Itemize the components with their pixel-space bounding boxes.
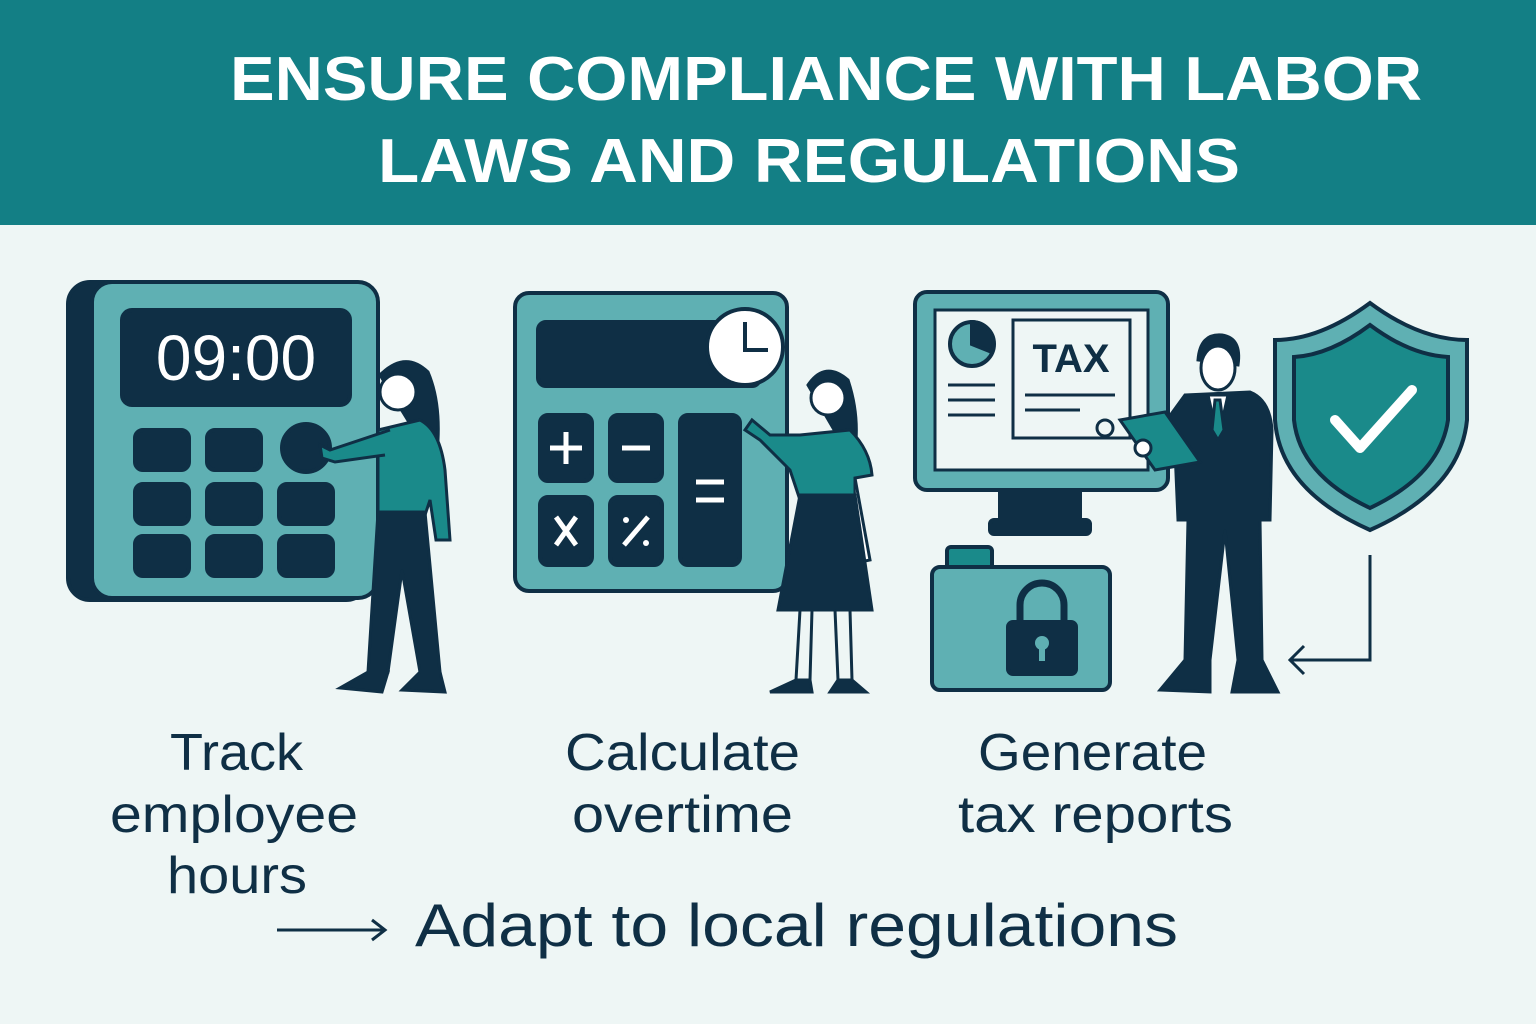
figure: businessman with tablet xyxy=(1120,335,1278,692)
label: track employee hours: hours xyxy=(167,847,307,905)
header banner xyxy=(0,0,1536,225)
title: ENSURE COMPLIANCE WITH LABOR xyxy=(230,45,1422,114)
label: calculate overtime: Calculate xyxy=(565,724,800,782)
label: generate tax reports: tax reports xyxy=(958,786,1233,844)
label: calculate overtime: overtime xyxy=(572,786,793,844)
label: track employee hours: Track xyxy=(170,724,304,782)
title: LAWS AND REGULATIONS xyxy=(378,127,1240,196)
icon: time clock xyxy=(68,282,378,600)
icon: monitor with tax report xyxy=(915,292,1168,534)
label: generate tax reports: Generate xyxy=(978,724,1207,782)
figure: woman pointing xyxy=(745,371,872,692)
icon: shield with checkmark xyxy=(1275,303,1467,530)
label: generate tax reports xyxy=(958,724,1233,844)
figure: woman pressing button xyxy=(320,362,450,692)
arrow: shield to man xyxy=(1290,555,1370,674)
title xyxy=(230,45,1422,196)
arrow: adapt xyxy=(277,920,385,940)
label: calculate overtime xyxy=(565,724,800,844)
icon: time clock: 09:00 xyxy=(156,322,316,394)
label: track employee hours xyxy=(110,724,358,905)
icon: calculator with clock xyxy=(515,293,787,591)
icon: locked folder xyxy=(932,547,1110,690)
label: track employee hours: employee xyxy=(110,786,358,844)
text: adapt to local regulations: Adapt to local regulations xyxy=(415,892,1178,959)
icon: monitor with tax report: TAX xyxy=(1032,337,1110,381)
